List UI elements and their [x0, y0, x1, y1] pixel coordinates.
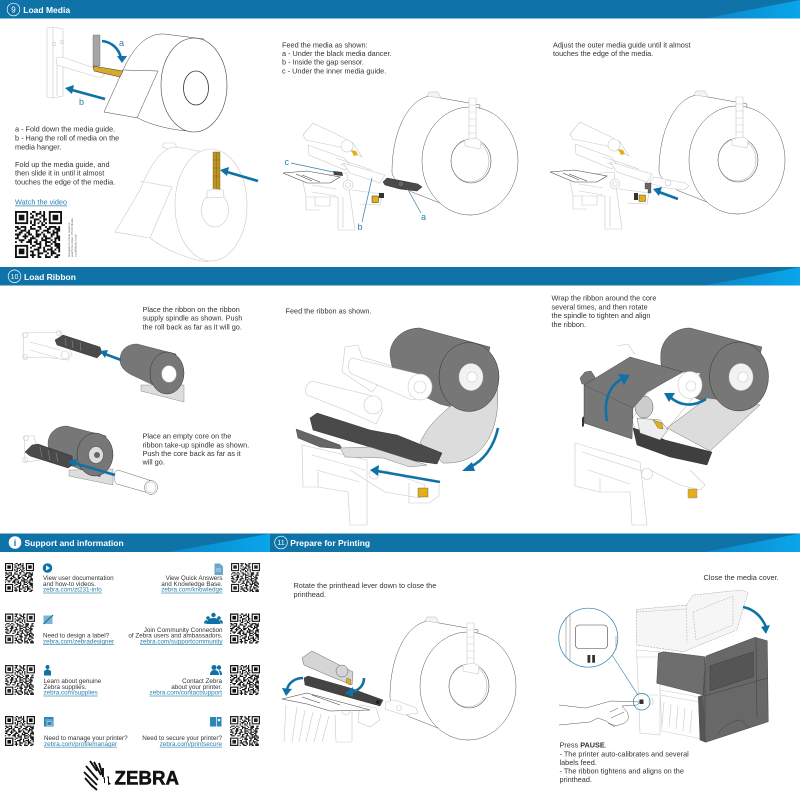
text: press pause: Press PAUSE. [560, 740, 607, 749]
text: vertical QR caption: watch the video: ZT231 Media [70, 218, 74, 257]
support item: community connection: Join Community Connection [144, 627, 223, 634]
header: Load Media: Load Media [23, 5, 70, 15]
text: wrap the ribbon: Wrap the ribbon around the core [552, 294, 656, 303]
text: wrap the ribbon: the ribbon. [552, 320, 586, 329]
text: place empty core [142, 432, 249, 467]
text: fold and hang steps [15, 125, 119, 186]
support item: secure printer: zebra.com/printsecure [160, 741, 222, 748]
support item: genuine supplies [5, 665, 102, 697]
header: Prepare for Printing: Prepare for Printing [290, 538, 370, 548]
illustration: ribbon feed [296, 328, 499, 525]
illustration: close printhead [282, 617, 516, 742]
arrow: slide guide [220, 167, 258, 181]
support item: community connection: zebra.com/supportcommunity [140, 638, 223, 645]
support item: contact Zebra: zebra.com/contactsupport [150, 690, 222, 697]
text: feed the media [282, 40, 392, 75]
arrow: a fold down: a [119, 38, 124, 48]
illustration: hand pressing [559, 701, 640, 727]
header: Load Media [0, 0, 800, 18]
arrow: supply spindle [100, 350, 121, 360]
text: adjust outer guide: touches the edge of the media. [553, 49, 653, 58]
header: Load Ribbon: Load Ribbon [24, 272, 76, 282]
illustration: printer with cover [636, 590, 768, 742]
text: place empty core: ribbon take-up spindle as shown. [142, 440, 249, 450]
support item: user documentation: View user documentation [43, 575, 114, 582]
arrow: ribbon curve [462, 428, 498, 471]
header: Load Media: 9 [11, 5, 16, 14]
text: feed the ribbon: Feed the ribbon as shown. [286, 306, 372, 315]
illustration: take-up spindle and empty core [22, 426, 158, 494]
support item: user documentation: and how-to videos. [43, 581, 96, 588]
header: Support and information: i [14, 538, 16, 548]
support item: contact Zebra: Contact Zebra [182, 678, 222, 685]
text: wrap the ribbon: several times, and then rotate [552, 302, 648, 312]
callout labels: a b c: c [284, 157, 290, 167]
QR code: video [15, 212, 61, 257]
illustration: adjust outer guide [550, 91, 785, 229]
support item: quick answers: zebra.com/knowledge [161, 587, 223, 594]
text: place ribbon on supply spindle: the roll back as far as it will go. [142, 322, 242, 332]
text: press pause: labels feed. [560, 758, 597, 767]
arrow: b hang roll [65, 85, 105, 107]
support item: genuine supplies: zebra.com/supplies [44, 690, 98, 697]
text: fold and hang steps: touches the edge of the media. [15, 177, 115, 186]
logo: Zebra: ZEBRA [114, 768, 179, 790]
arrow: take-up spindle [68, 459, 115, 475]
illustration: wrap ribbon around take-up core [575, 328, 768, 525]
text: place ribbon on supply spindle: Place the ribbon on the ribbon [142, 305, 240, 314]
text: place ribbon on supply spindle [142, 305, 242, 332]
text: feed the media: Feed the media as shown: [282, 40, 368, 49]
arrow: feed under printhead [370, 465, 440, 482]
header: Prepare for Printing: 11 [277, 540, 285, 547]
support item: genuine supplies: Learn about genuine [44, 678, 102, 685]
text: adjust outer guide: Adjust the outer media guide until it almost [553, 40, 691, 49]
logo: Zebra [84, 761, 179, 790]
text: fold and hang steps: media hanger. [15, 143, 61, 152]
text: fold and hang steps: then slide it in until it almost [15, 169, 104, 178]
text: place empty core: Push the core back as far as it [142, 449, 241, 458]
text: wrap the ribbon: the spindle to tighten and align [552, 311, 650, 320]
support item: user documentation [5, 563, 114, 594]
arrow: a fold down [102, 38, 127, 63]
arrow: b hang roll: b [79, 97, 84, 107]
header: Load Ribbon [0, 267, 800, 286]
text: fold and hang steps: Fold up the media guide, and [15, 160, 110, 169]
callout labels: a b c: b [358, 222, 363, 232]
text: fold and hang steps: a - Fold down the media guide. [15, 125, 115, 134]
text: press pause: - The printer auto-calibrates and several [560, 750, 689, 759]
callout: pause button [559, 608, 650, 710]
support item: quick answers [161, 564, 259, 594]
illustration: supply spindle and ribbon roll [22, 330, 184, 402]
header: Prepare for Printing [270, 534, 800, 552]
support item: quick answers: View Quick Answers [166, 575, 222, 582]
text: press pause: printhead. [560, 775, 592, 784]
support item: community connection: of Zebra users and ambassadors. [128, 632, 223, 640]
support item: design a label: zebra.com/zebradesigner [43, 638, 114, 645]
support item: community connection [128, 613, 259, 645]
text: rotate printhead lever: printhead. [294, 590, 326, 599]
text: place empty core: will go. [142, 458, 165, 467]
support item: manage printer: Need to manage your printer? [44, 735, 128, 742]
support item: contact Zebra: about your printer. [171, 684, 222, 691]
header: Support and information [0, 534, 270, 552]
support item: secure printer [142, 717, 259, 748]
text: feed the media: b - Inside the gap sensor. [282, 58, 364, 67]
text: vertical QR caption: Load/Media Load [73, 234, 77, 257]
text: adjust outer guide [553, 40, 691, 58]
arrow: wrap upward [606, 374, 630, 421]
illustration: slide up media guide [115, 143, 247, 262]
text: rotate printhead lever [294, 581, 436, 599]
support item: design a label: Need to design a label? [43, 632, 110, 640]
text: wrap the ribbon [552, 294, 656, 329]
text: press pause: - The ribbon tightens and aligns on the [560, 767, 684, 776]
callout labels: a b c: a [421, 212, 426, 222]
text: rotate printhead lever: Rotate the printhead lever down to close the [294, 581, 436, 590]
text: fold and hang steps: b - Hang the roll of media on the [15, 134, 119, 143]
support item: user documentation: zebra.com/zt231-info [43, 587, 102, 594]
arrow: rotate spindle [664, 393, 706, 405]
support item: genuine supplies: Zebra supplies. [44, 684, 87, 691]
text: place ribbon on supply spindle: supply spindle as shown. Push [142, 314, 242, 323]
text: feed the media: c - Under the inner media guide. [282, 66, 386, 75]
support item: secure printer: Need to secure your printer? [142, 735, 222, 742]
text: place empty core: Place an empty core on the [142, 432, 231, 441]
header: Load Ribbon: 10 [11, 274, 18, 281]
header: Support and information: Support and information [24, 538, 124, 548]
arrow: rotate head down left [282, 678, 303, 696]
illustration: media feed path [283, 92, 518, 230]
arrow: cover down [743, 607, 770, 634]
text: vertical QR caption: Navigate to online support/ [67, 222, 71, 257]
illustration: fold down media guide and hang roll [47, 27, 227, 132]
support item: manage printer [5, 717, 128, 748]
link: watch the video: Watch the video [15, 198, 67, 206]
text: close the media cover: Close the media cover. [704, 573, 779, 582]
callout labels: a b c [284, 157, 426, 232]
support item: manage printer: zebra.com/profilemanager [44, 741, 117, 748]
arrow: adjust guide [653, 187, 678, 199]
text: vertical QR caption [67, 218, 77, 257]
support item: contact Zebra [150, 665, 259, 697]
text: press pause [560, 740, 689, 784]
arrow: rotate lever [345, 678, 364, 697]
support item: design a label [5, 614, 114, 645]
support item: quick answers: and Knowledge Base. [161, 581, 223, 588]
text: feed the media: a - Under the black media dancer. [282, 49, 392, 58]
